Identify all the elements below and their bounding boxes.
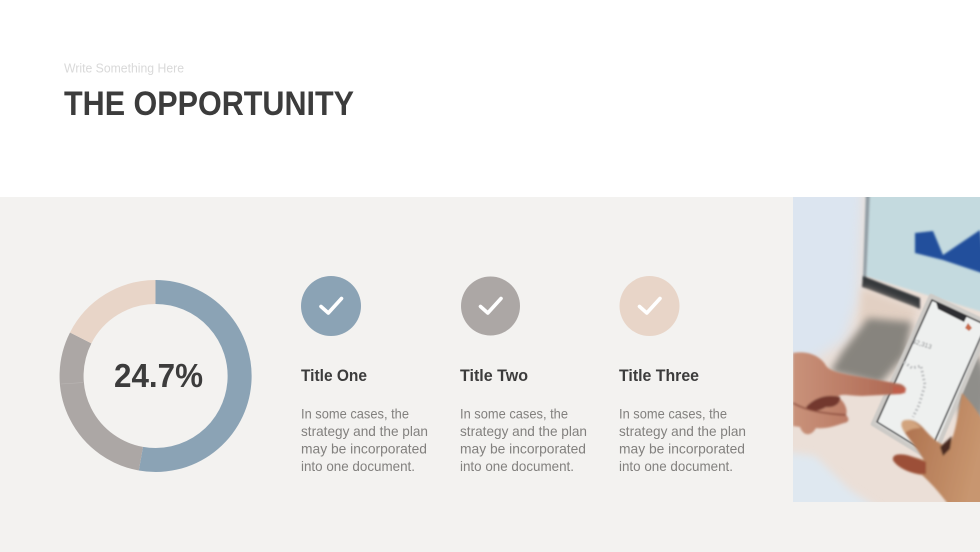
body text: may be incorporated bbox=[460, 440, 586, 456]
background panel bbox=[0, 197, 980, 552]
segment: gray bbox=[72, 338, 141, 459]
donut value: 24.7% bbox=[114, 358, 203, 395]
body text: In some cases, the bbox=[301, 406, 409, 422]
body text: strategy and the plan bbox=[301, 423, 428, 439]
body text bbox=[619, 406, 746, 474]
heading: Title Three bbox=[619, 366, 699, 385]
body text: strategy and the plan bbox=[619, 423, 746, 439]
icon: check circle gray bbox=[461, 276, 520, 336]
body text: strategy and the plan bbox=[460, 423, 587, 439]
title: THE OPPORTUNITY bbox=[64, 85, 354, 123]
icon: check circle blue bbox=[301, 276, 361, 336]
body text: into one document. bbox=[460, 458, 574, 474]
column: title one bbox=[301, 276, 428, 474]
body text bbox=[460, 406, 587, 474]
segment: blue bbox=[141, 292, 240, 460]
phone: $2,313 bbox=[911, 338, 933, 351]
body text: may be incorporated bbox=[301, 440, 427, 456]
column: title two bbox=[460, 276, 587, 474]
body text bbox=[301, 406, 428, 474]
icon: check circle peach bbox=[620, 276, 680, 336]
body text: may be incorporated bbox=[619, 440, 745, 456]
column: title three bbox=[619, 276, 746, 474]
subtitle: Write Something Here bbox=[64, 60, 184, 76]
left hand bbox=[793, 352, 906, 434]
heading: Title Two bbox=[460, 366, 528, 385]
photo: hands with smartphone bbox=[793, 197, 980, 502]
phone bbox=[873, 296, 980, 460]
body text: into one document. bbox=[619, 458, 733, 474]
body text: In some cases, the bbox=[619, 406, 727, 422]
segment: peach bbox=[81, 292, 156, 338]
donut chart bbox=[61, 292, 240, 460]
right hand bbox=[893, 393, 980, 510]
body text: In some cases, the bbox=[460, 406, 568, 422]
body text: into one document. bbox=[301, 458, 415, 474]
heading: Title One bbox=[301, 366, 367, 385]
